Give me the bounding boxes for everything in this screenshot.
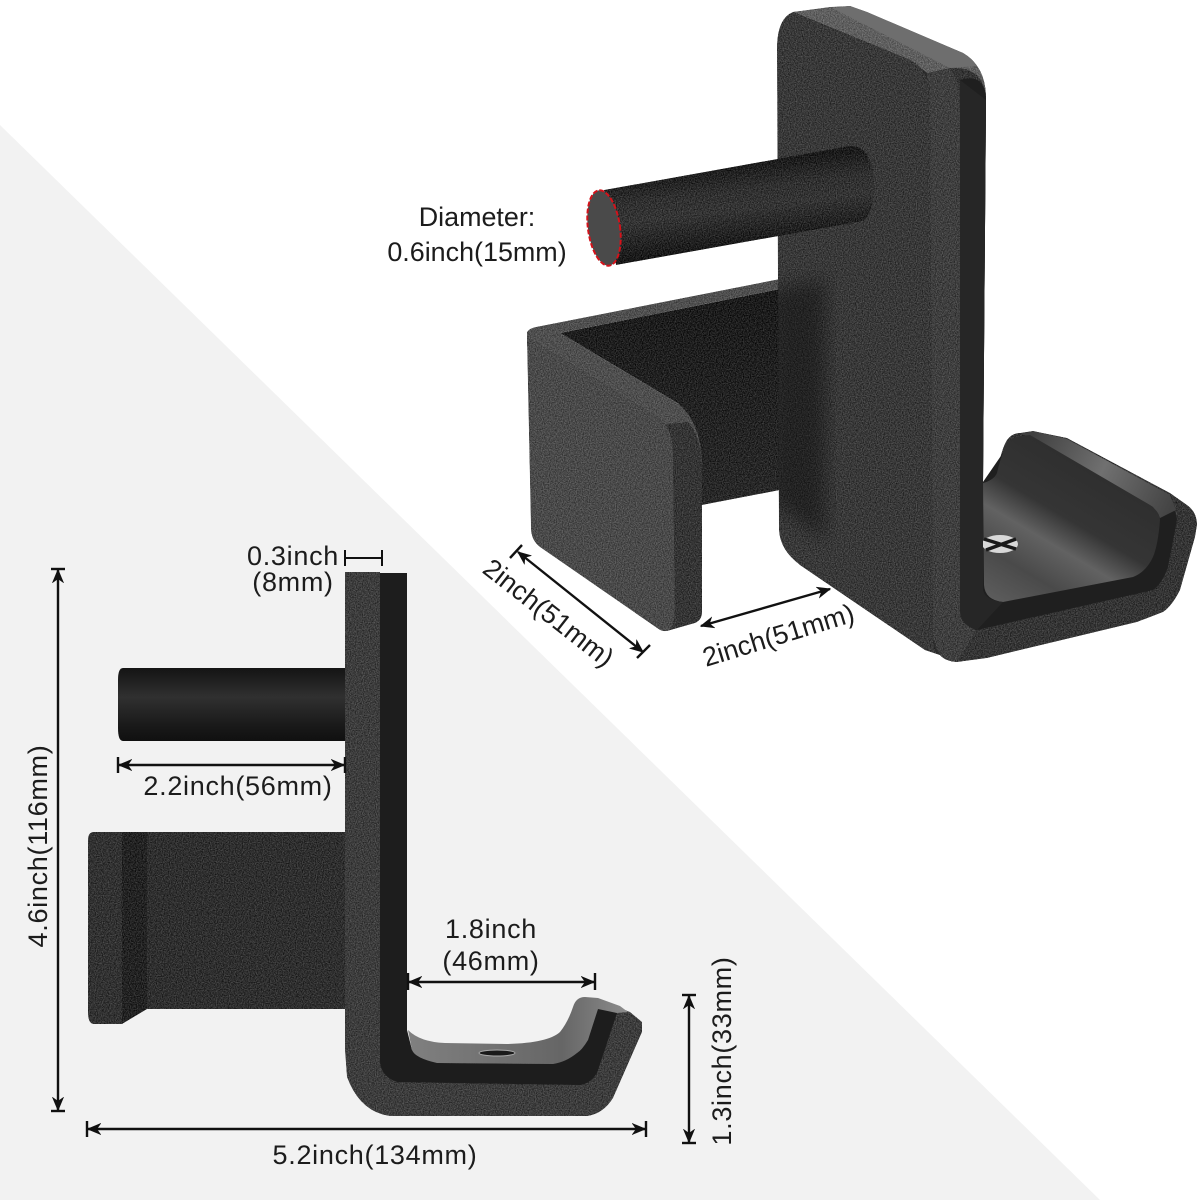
hook: cylinder peg xyxy=(583,146,874,268)
dimension: foot width arrow xyxy=(408,973,595,990)
side: inner dark band xyxy=(380,573,617,1085)
dimension label: opening width: 2inch(51mm) xyxy=(699,598,858,673)
dimension label: arm depth: 2inch(51mm) xyxy=(477,553,620,673)
label: diameter: 0.6inch(15mm) xyxy=(387,237,567,267)
dimension label: foot width: (46mm) xyxy=(442,946,540,976)
hook: arm top surface xyxy=(527,279,780,480)
hook: plate band re-cover xyxy=(960,80,1003,630)
hook: plate silhouette base xyxy=(779,6,986,662)
dimension label: total height: 4.6inch(116mm) xyxy=(23,745,53,947)
hook: screw xyxy=(982,535,1018,553)
dimension: opening width arrow xyxy=(701,589,830,626)
hook: plate top smooth strip xyxy=(832,6,977,68)
dimension label: foot width: 1.8inch xyxy=(445,914,537,944)
hook: inner arm wall xyxy=(560,289,780,505)
dimension: peg length arrow xyxy=(118,757,345,773)
hook: plate top edge xyxy=(793,6,986,100)
label: diameter: Diameter: xyxy=(419,202,535,232)
hook: foot inner surface xyxy=(983,435,1160,602)
dimension label: plate thickness: 0.3inch xyxy=(247,541,339,571)
product: perspective view of hook xyxy=(527,6,1197,662)
dimension label: peg length: 2.2inch(56mm) xyxy=(143,771,333,801)
hook: foot and back band silhouette xyxy=(930,68,1197,662)
dimension label: plate thickness: (8mm) xyxy=(252,567,334,597)
side: outer L plate xyxy=(345,572,642,1116)
side: arm end cap xyxy=(88,832,122,1024)
hook: plate front face xyxy=(777,12,940,655)
dimension label: foot height: 1.3inch(33mm) xyxy=(707,956,737,1146)
label: diameter xyxy=(387,202,567,267)
side: arm chamfer xyxy=(122,832,147,1024)
dimension: plate thickness bracket xyxy=(345,550,382,566)
dimension label: foot width xyxy=(442,914,540,976)
dimension: foot height arrow xyxy=(682,995,696,1143)
hook: plate middle band xyxy=(927,68,977,662)
hook: inner dark band xyxy=(960,78,1177,630)
product: side view of hook xyxy=(88,572,642,1116)
dimension: total width arrow xyxy=(87,1121,646,1137)
hook: arm end band xyxy=(660,422,702,631)
dimension: total height arrow xyxy=(51,569,65,1111)
side: gray foot surface xyxy=(408,997,628,1064)
dimension label: total width: 5.2inch(134mm) xyxy=(273,1140,477,1170)
side: arm block xyxy=(147,832,345,1009)
dimension label: plate thickness xyxy=(247,541,339,597)
dimension: arm depth arrow xyxy=(510,545,650,658)
side: screw slot xyxy=(479,1050,515,1056)
hook: cylinder end with red dashed outline xyxy=(583,188,625,268)
hook: foot top band xyxy=(1021,431,1176,518)
hook: arm side face xyxy=(527,337,675,631)
side: peg cylinder xyxy=(118,668,345,741)
hook: plate shadow from arm xyxy=(770,280,825,540)
